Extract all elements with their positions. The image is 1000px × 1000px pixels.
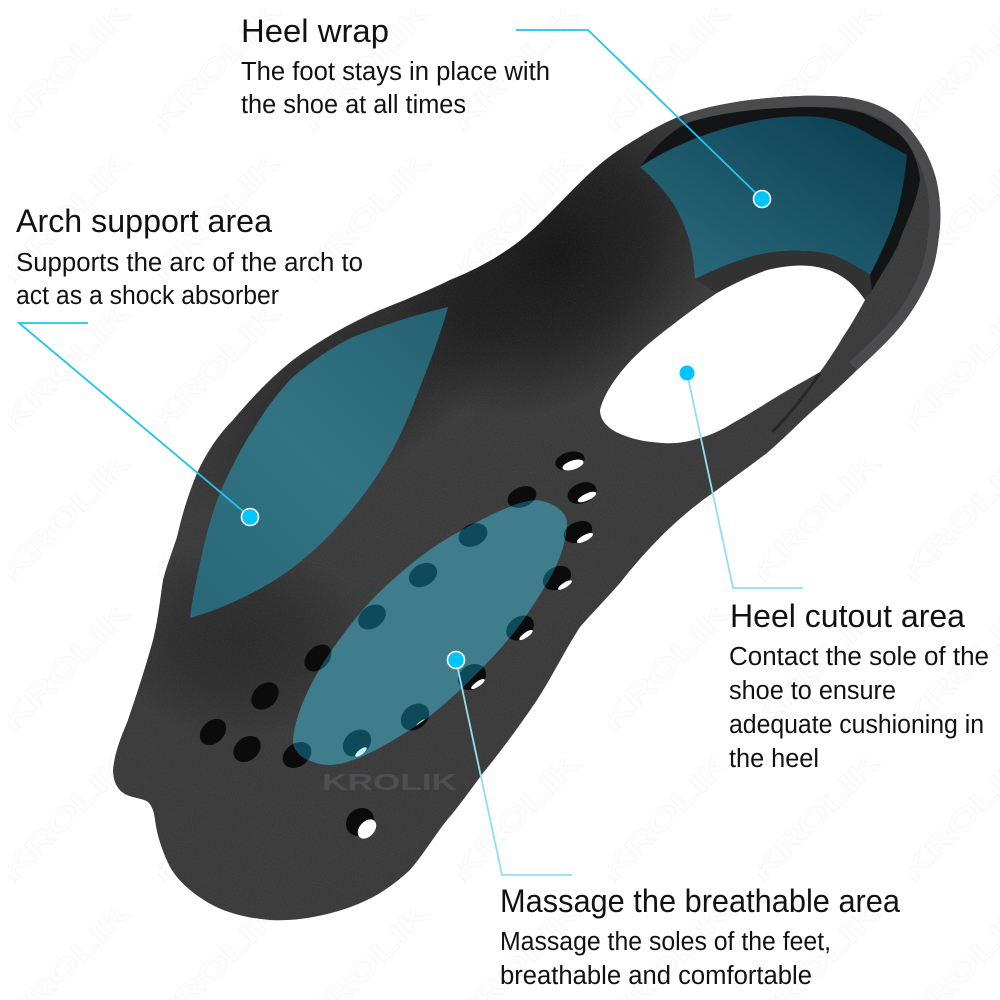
massage teal panel bbox=[293, 500, 567, 765]
cutout text: Contact the sole of the bbox=[729, 643, 989, 671]
brand mark: KROLIK bbox=[322, 769, 458, 795]
callout: heel wrap bbox=[241, 13, 770, 208]
massage leader line bbox=[456, 660, 572, 875]
heel wrap leader line bbox=[516, 30, 762, 199]
cutout heading: Heel cutout area bbox=[730, 598, 966, 634]
insole body bbox=[113, 96, 940, 920]
arch heading: Arch support area bbox=[16, 203, 273, 239]
massage text: Massage the soles of the feet, bbox=[500, 928, 831, 956]
heel rim band bbox=[695, 251, 872, 300]
insole bbox=[113, 96, 940, 920]
cutout text: shoe to ensure bbox=[729, 677, 896, 705]
massage text: breathable and comfortable bbox=[500, 962, 812, 990]
massage marker bbox=[448, 652, 464, 668]
heel wrap marker bbox=[754, 190, 770, 208]
arch marker bbox=[242, 508, 258, 526]
callout: heel cutout bbox=[680, 366, 989, 773]
heel wrap heading: Heel wrap bbox=[241, 13, 389, 49]
cutout text: the heel bbox=[729, 745, 819, 773]
arch text: Supports the arc of the arch to bbox=[16, 249, 363, 277]
arch support teal panel bbox=[190, 307, 448, 618]
hole highlights bbox=[354, 457, 598, 842]
heel cutout bbox=[600, 266, 865, 443]
arch leader line bbox=[19, 323, 250, 517]
ventilation holes bbox=[195, 448, 600, 842]
heel wrap text bbox=[241, 58, 550, 119]
cutout marker bbox=[680, 366, 694, 380]
heel wrap text: the shoe at all times bbox=[241, 91, 466, 119]
cutout text: adequate cushioning in bbox=[729, 711, 984, 739]
heel cup inner shadow band bbox=[640, 107, 920, 290]
massage text bbox=[500, 928, 831, 990]
arch text bbox=[16, 249, 363, 310]
arch text: act as a shock absorber bbox=[16, 282, 279, 310]
callout: massage bbox=[448, 652, 901, 990]
callout: arch support bbox=[16, 203, 363, 526]
cutout leader line bbox=[687, 373, 803, 588]
heel wrap teal panel bbox=[640, 116, 907, 279]
heel wrap text: The foot stays in place with bbox=[241, 58, 550, 86]
massage heading: Massage the breathable area bbox=[500, 883, 901, 919]
cutout text bbox=[729, 643, 989, 773]
